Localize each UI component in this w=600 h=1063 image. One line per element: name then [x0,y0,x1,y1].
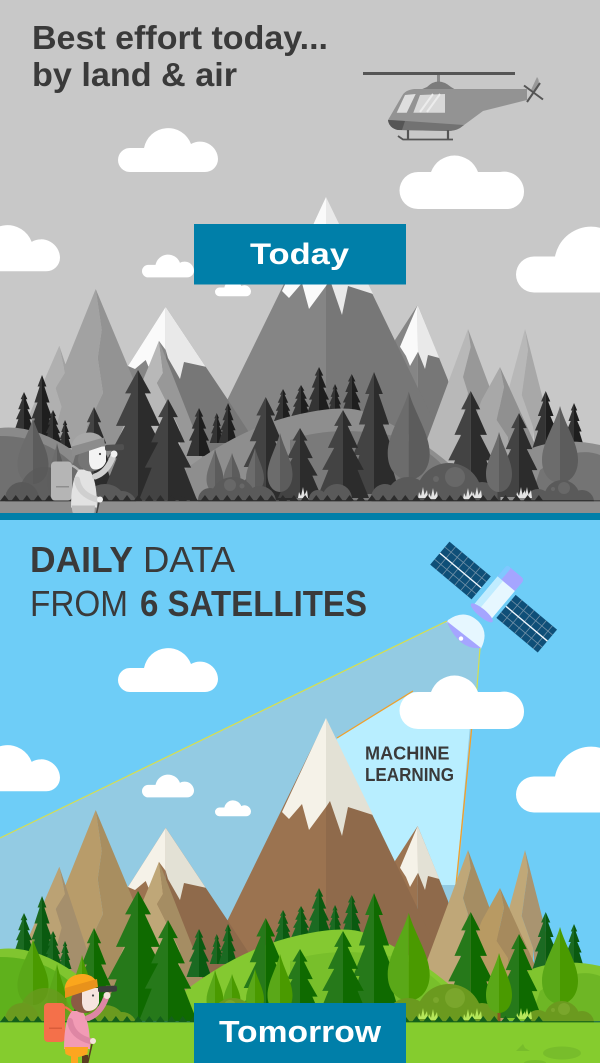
label: tomorrow: Tomorrow [219,1014,382,1049]
icon: satellite [430,542,557,653]
label: machine learning [365,742,454,785]
forest: today [0,367,600,529]
label: today: Today [250,238,349,271]
heading: daily data from 6 satellites: 6 SATELLITES [140,583,367,624]
clouds: tomorrow [0,648,600,816]
ground: today [0,501,600,513]
label: today [194,224,406,284]
mountains: tomorrow [14,718,575,1021]
satellite beam [0,621,480,960]
clouds: today [0,128,600,296]
forest: tomorrow [0,888,600,1050]
heading: daily data from 6 satellites: DAILY [30,539,133,580]
title: best effort today: by land & air [32,56,237,93]
divider strip [0,513,600,520]
hiker: today [51,432,124,526]
hiker: tomorrow [44,974,117,1063]
icon: helicopter [363,72,543,140]
label: machine learning: LEARNING [365,764,454,785]
mountains: today [14,197,575,500]
heading: daily data from 6 satellites: FROM [30,583,128,624]
heading: daily data from 6 satellites [30,539,367,624]
label: tomorrow [194,1003,406,1063]
heading: daily data from 6 satellites: DATA [143,539,235,580]
panel: today [0,0,600,529]
title: best effort today [32,19,328,93]
ground: tomorrow [0,1022,600,1063]
title: best effort today: Best effort today... [32,19,328,56]
label: machine learning: MACHINE [365,742,450,763]
panel: tomorrow [0,520,600,1063]
